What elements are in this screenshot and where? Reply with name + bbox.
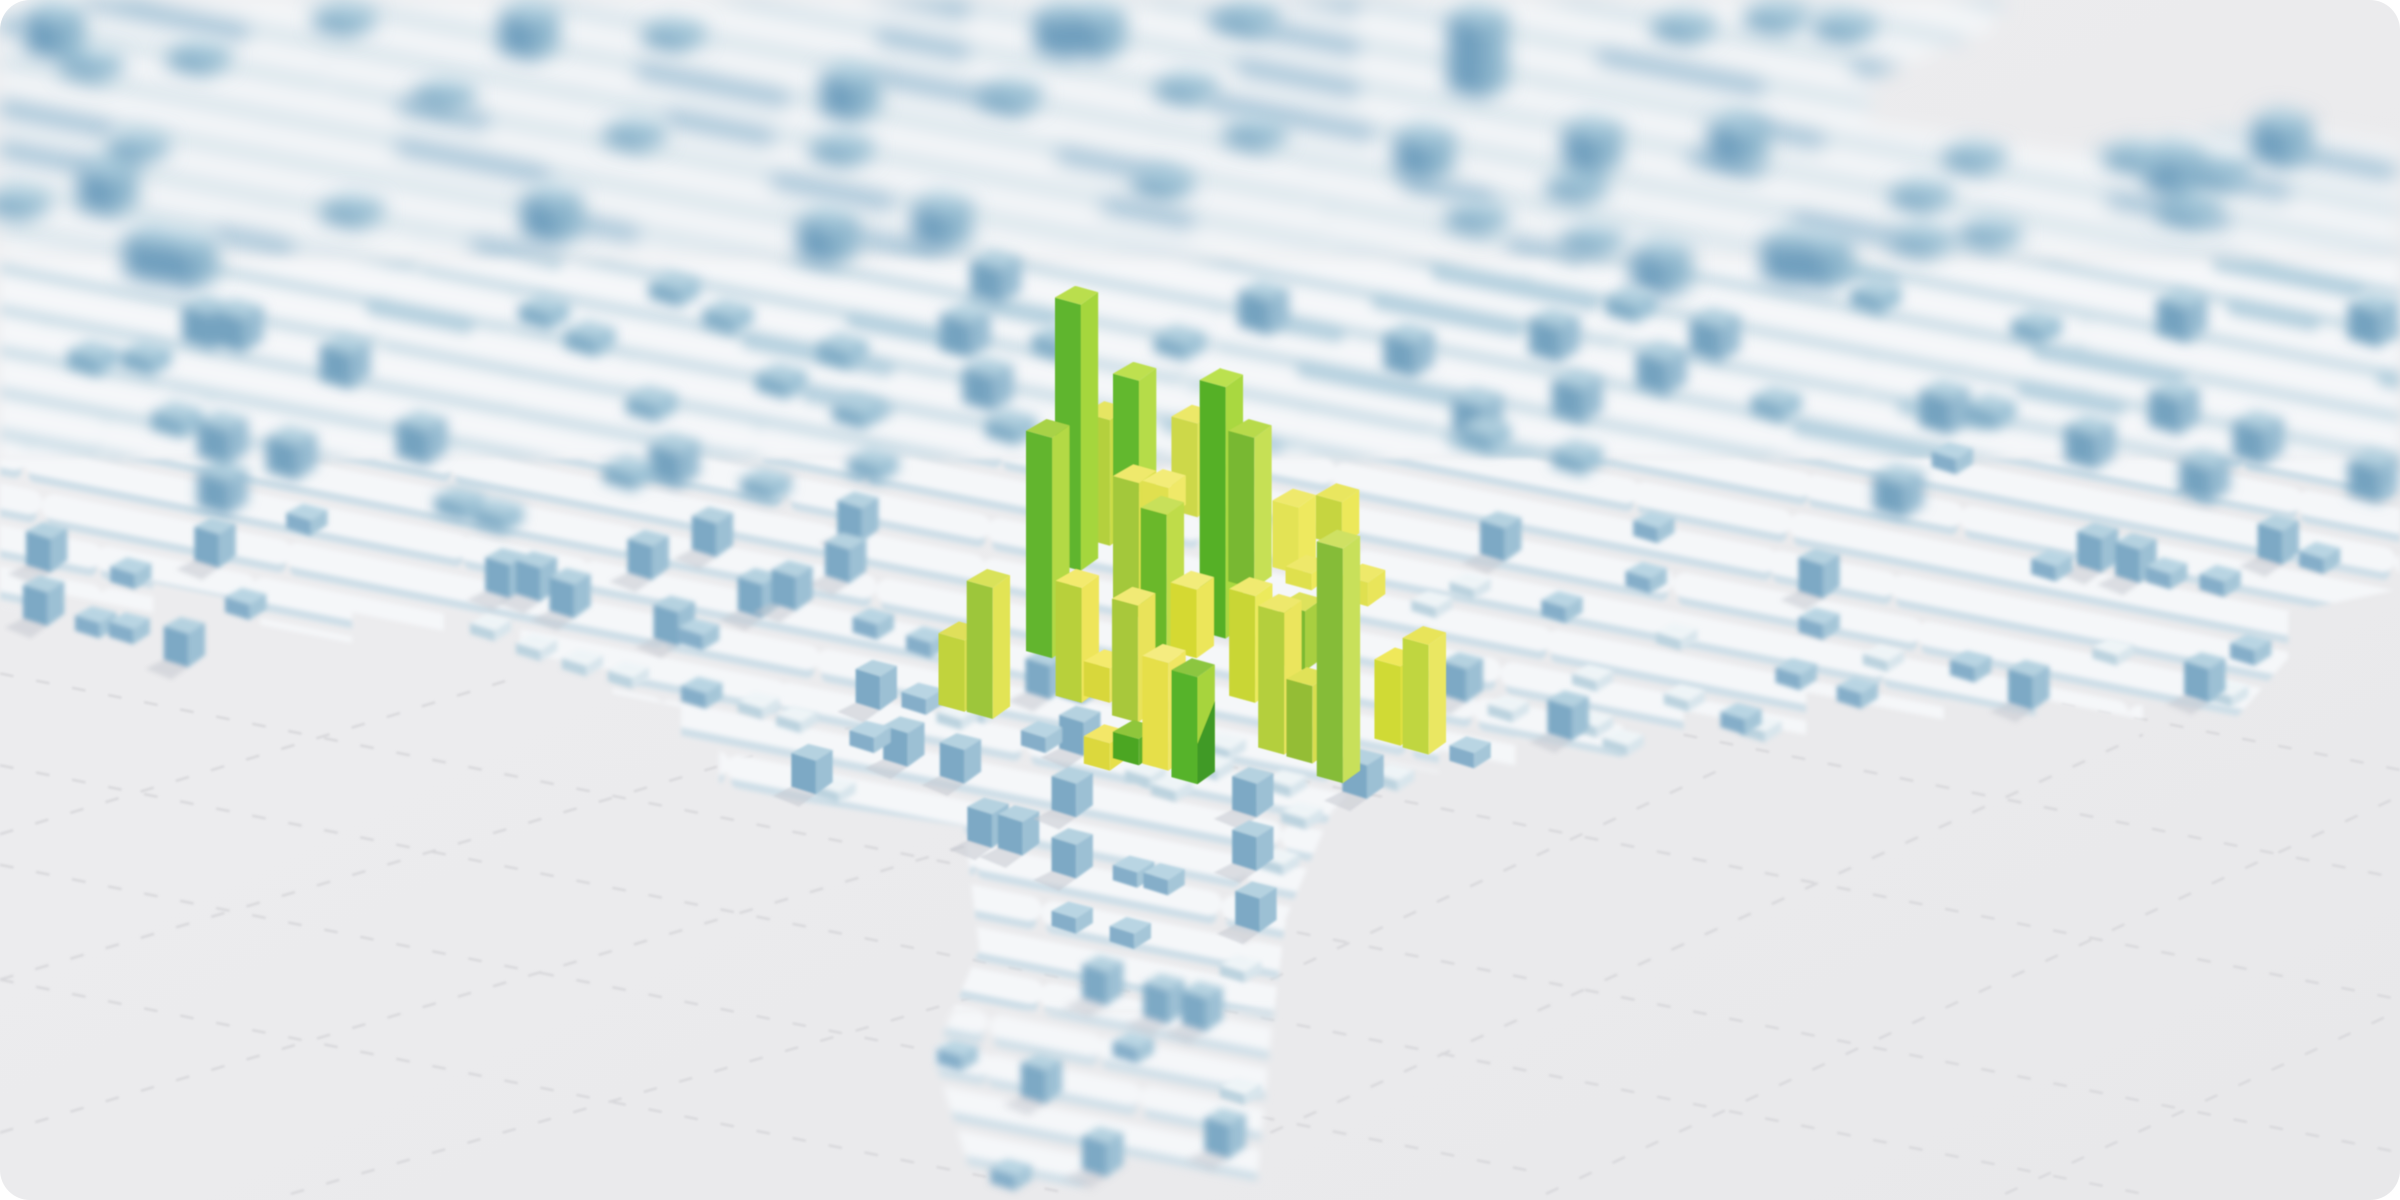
- bar: right lime low: [1286, 667, 1330, 764]
- bar: small dark green: [1113, 720, 1156, 765]
- land: foreground peninsula rows: [938, 1008, 1274, 1188]
- bar: yellow olive right: [1316, 483, 1359, 546]
- bar: far left tall: [967, 569, 1010, 719]
- blue cubes: in focus near the bars: [5, 442, 2340, 753]
- bar: outer right short: [1374, 647, 1418, 746]
- bar: center green: [1141, 496, 1184, 653]
- bar: right tall green: [1317, 530, 1360, 783]
- bar: rear lime: [1084, 401, 1127, 546]
- bar: center yellow top: [1142, 469, 1186, 517]
- bar: rear yellow: [1171, 405, 1215, 517]
- bar: tallest green: [1055, 286, 1098, 571]
- bar: small yellow: [1084, 724, 1127, 771]
- bar chart: central green and yellow bars: [939, 286, 1446, 784]
- blue cubes: lower peninsula: [773, 660, 1491, 949]
- bar: deep green: [1200, 368, 1243, 639]
- bar: low yellow rear: [1286, 555, 1329, 590]
- land: far blurred base and rows: [0, 0, 2400, 264]
- pale cubes: near rows: [470, 572, 2248, 1105]
- bar: thin green: [1279, 592, 1322, 671]
- bar: yellow front left: [1056, 569, 1099, 703]
- blue cubes: middle distance: [67, 249, 2398, 534]
- bar: yellow front: [1142, 644, 1186, 771]
- bar: yellow center right: [1171, 571, 1214, 658]
- bar: yellow behind tall right: [1342, 564, 1385, 606]
- bar: far left short: [939, 621, 982, 712]
- bar: second green: [1113, 362, 1156, 492]
- bar: low yellow center: [1084, 649, 1127, 703]
- bar: green front: [1171, 658, 1215, 784]
- bar: left tall green: [1026, 419, 1070, 658]
- land: near rows: [0, 457, 2400, 1012]
- blue cubes: far out of focus: [0, 0, 2311, 298]
- blue cubes: blurred foreground: [937, 955, 1246, 1191]
- bar: mid green right: [1228, 419, 1272, 589]
- bar: outer right tall: [1403, 626, 1446, 755]
- bar: right yellow rear: [1273, 489, 1316, 574]
- bar: yellow free-standing: [1229, 577, 1273, 703]
- ground grid: dashed lines: [0, 673, 2400, 1194]
- bar: right yellow tall: [1258, 594, 1302, 755]
- land: middle rows: [0, 254, 2400, 465]
- bar: yellow center front: [1112, 587, 1155, 722]
- bar: center lime: [1113, 464, 1156, 617]
